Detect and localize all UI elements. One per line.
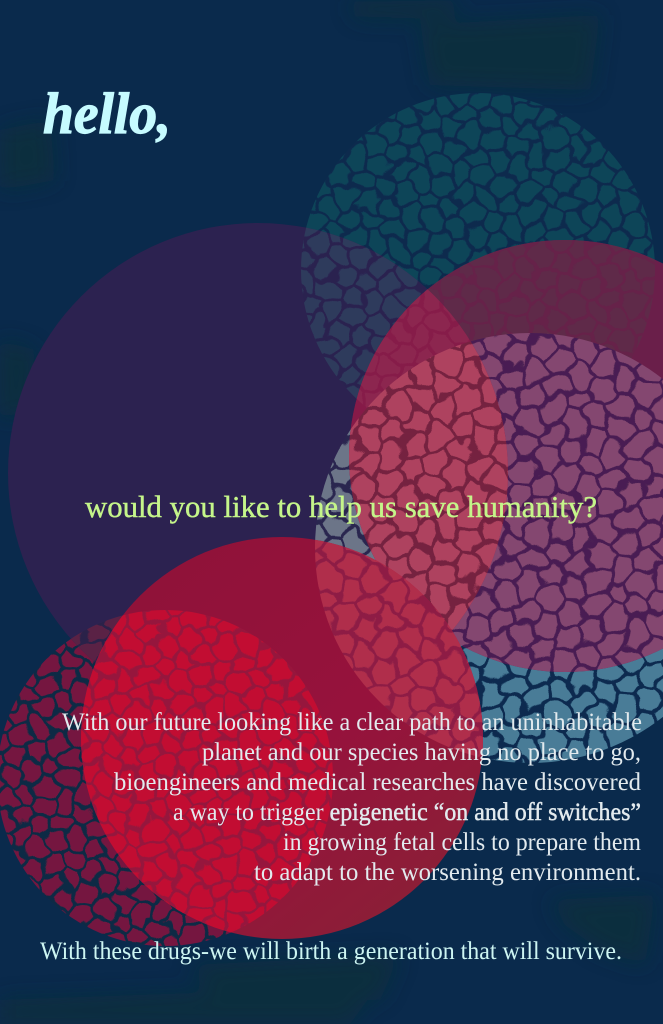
text block: body paragraph: to adapt to the worsening environment. [254,859,641,886]
circle: teal cell pattern [306,93,654,286]
text block: body paragraph: bioengineers and medical researches have discovered [114,769,641,796]
text block: closing line: With these drugs-we will birth a generation that will survive. [40,938,622,965]
circle: dark purple [8,223,428,663]
text block: body paragraph [62,709,642,886]
text block: body paragraph: in growing fetal cells to prepare them [283,829,642,856]
heading: question: would you like to help us save humanity? [85,489,597,524]
text block: body paragraph: planet and our species having no place to go, [202,739,641,766]
circle: pale blue cell pattern [460,645,663,763]
circle: crimson overlay right [349,240,663,672]
title: hello: hello, [43,81,171,146]
text block: body paragraph: a way to trigger epigenetic “on and off switches” [173,799,641,826]
text block: body paragraph: With our future looking like a clear path to an uninhabitable [62,709,642,736]
circle: large red [81,537,483,939]
circle: maroon cell pattern lower left [0,639,231,946]
